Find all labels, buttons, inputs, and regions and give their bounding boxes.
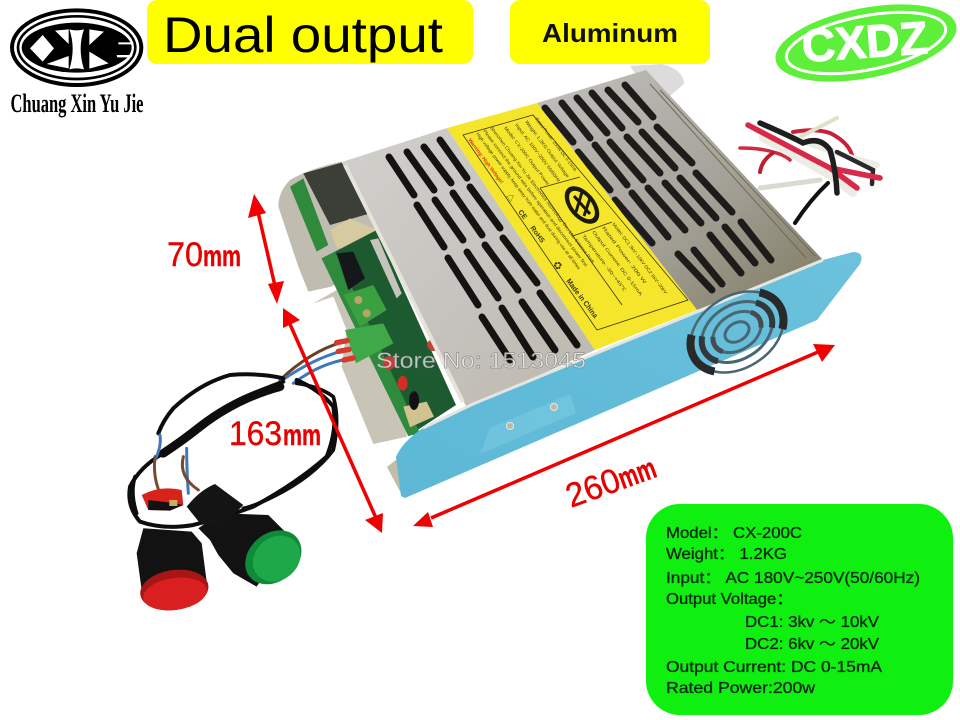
yellow product label: CE (516, 209, 528, 221)
spec: DC1: DC1: 3kv ～ 10kV (745, 614, 880, 631)
heading badge: Dual output (147, 0, 473, 64)
power supply unit (278, 64, 880, 498)
yellow product label: Rated Power: 200 W (601, 226, 648, 286)
indicator lamp: green (187, 484, 312, 595)
spec: DC2: DC2: 6kv ～ 20kV (745, 636, 880, 653)
yellow product label: Model: CX-200C Output Power (503, 126, 551, 187)
spec: output current: Output Current: DC 0-15mA (666, 659, 883, 676)
left silver wall and circuit board (278, 162, 456, 444)
yellow product label: △ (504, 192, 516, 204)
yellow product label: RoHS (528, 225, 546, 245)
yellow product label: Temperature: -20~+45℃ (581, 234, 628, 293)
yellow product label: Shenzhen Chuang Xin Yu Jie Electronics Technology Co., Ltd, Science Park (489, 126, 596, 265)
heading badge: Dual output: Dual output (163, 7, 443, 63)
fan vent on panel (676, 275, 798, 389)
logo caption: Chuang Xin Yu Jie (10, 89, 144, 118)
high voltage output wires (740, 118, 880, 223)
dimension label: 70mm: mm (203, 240, 241, 273)
yellow product label: Made in China (564, 277, 600, 320)
brand logo: CXDZ (769, 0, 960, 95)
indicator lamp: red (137, 488, 211, 615)
dimension label: 260mm: 260 (561, 461, 625, 516)
dimension label: 163mm: mm (283, 419, 321, 452)
dimension label: 163mm: 163 (229, 415, 282, 453)
yellow product label: ♻ (551, 260, 563, 272)
dimension label: 260mm (561, 448, 661, 516)
ventilation slots left (389, 140, 577, 360)
spec: output voltage: Output Voltage： (666, 591, 793, 608)
blue front panel (396, 252, 861, 498)
yellow product label: Input: AC 180V~250V 50/60Hz (514, 123, 562, 184)
yellow product label: Please connect the ground wire before operation and disconnect power first (482, 129, 589, 268)
yellow product label (447, 103, 697, 350)
dimension label: 70mm: 70 (167, 236, 203, 274)
spec: rated power: Rated Power:200w (666, 680, 816, 697)
rear silver flap (630, 64, 684, 96)
yellow product label: High voltage power supply, keep away from water and dust during use at all times (475, 132, 582, 271)
yellow product label: Output Current: DC 0-15mA (591, 230, 643, 296)
spec: weight: Weight： 1.2KG (666, 546, 787, 563)
spec: input: Input： AC 180V~250V(50/60Hz) (666, 570, 920, 587)
metal top plate left section (342, 128, 595, 408)
metal top plate right section (537, 70, 823, 310)
dimension arrow: 70mm (248, 194, 284, 304)
panel screw holes (506, 404, 558, 430)
yellow product label: Warning: High Voltage! (466, 138, 504, 185)
dimension arrow: 260mm (413, 344, 835, 527)
brand logo: CXDZ: CXDZ (800, 11, 929, 72)
spec: model: Model： CX-200C (666, 525, 802, 542)
lower silver tab (387, 459, 403, 497)
dimension arrow: 163mm (283, 308, 383, 533)
panel: specifications (646, 504, 953, 715)
heading badge: Aluminum: Aluminum (542, 18, 678, 48)
dimension label: 70mm (167, 236, 241, 274)
yellow product label: Rated Power: 200W DC 0-15mA (534, 117, 578, 172)
lamp leads and control cable (129, 341, 353, 527)
dimension label: 163mm (229, 415, 321, 453)
yellow product label: Weight: 1.2KG Output Voltage (524, 120, 571, 179)
dimension label: 260mm: mm (614, 452, 661, 496)
brand logo: Chuang Xin Yu Jie (10, 8, 144, 118)
heading badge: Aluminum (510, 0, 710, 64)
watermark: store number: Store No: 1513045 (376, 348, 586, 373)
ventilation slots right (545, 85, 771, 290)
yellow product label: Model: DC1 3kV~10kV DC2 6kV~20kV (611, 222, 668, 295)
